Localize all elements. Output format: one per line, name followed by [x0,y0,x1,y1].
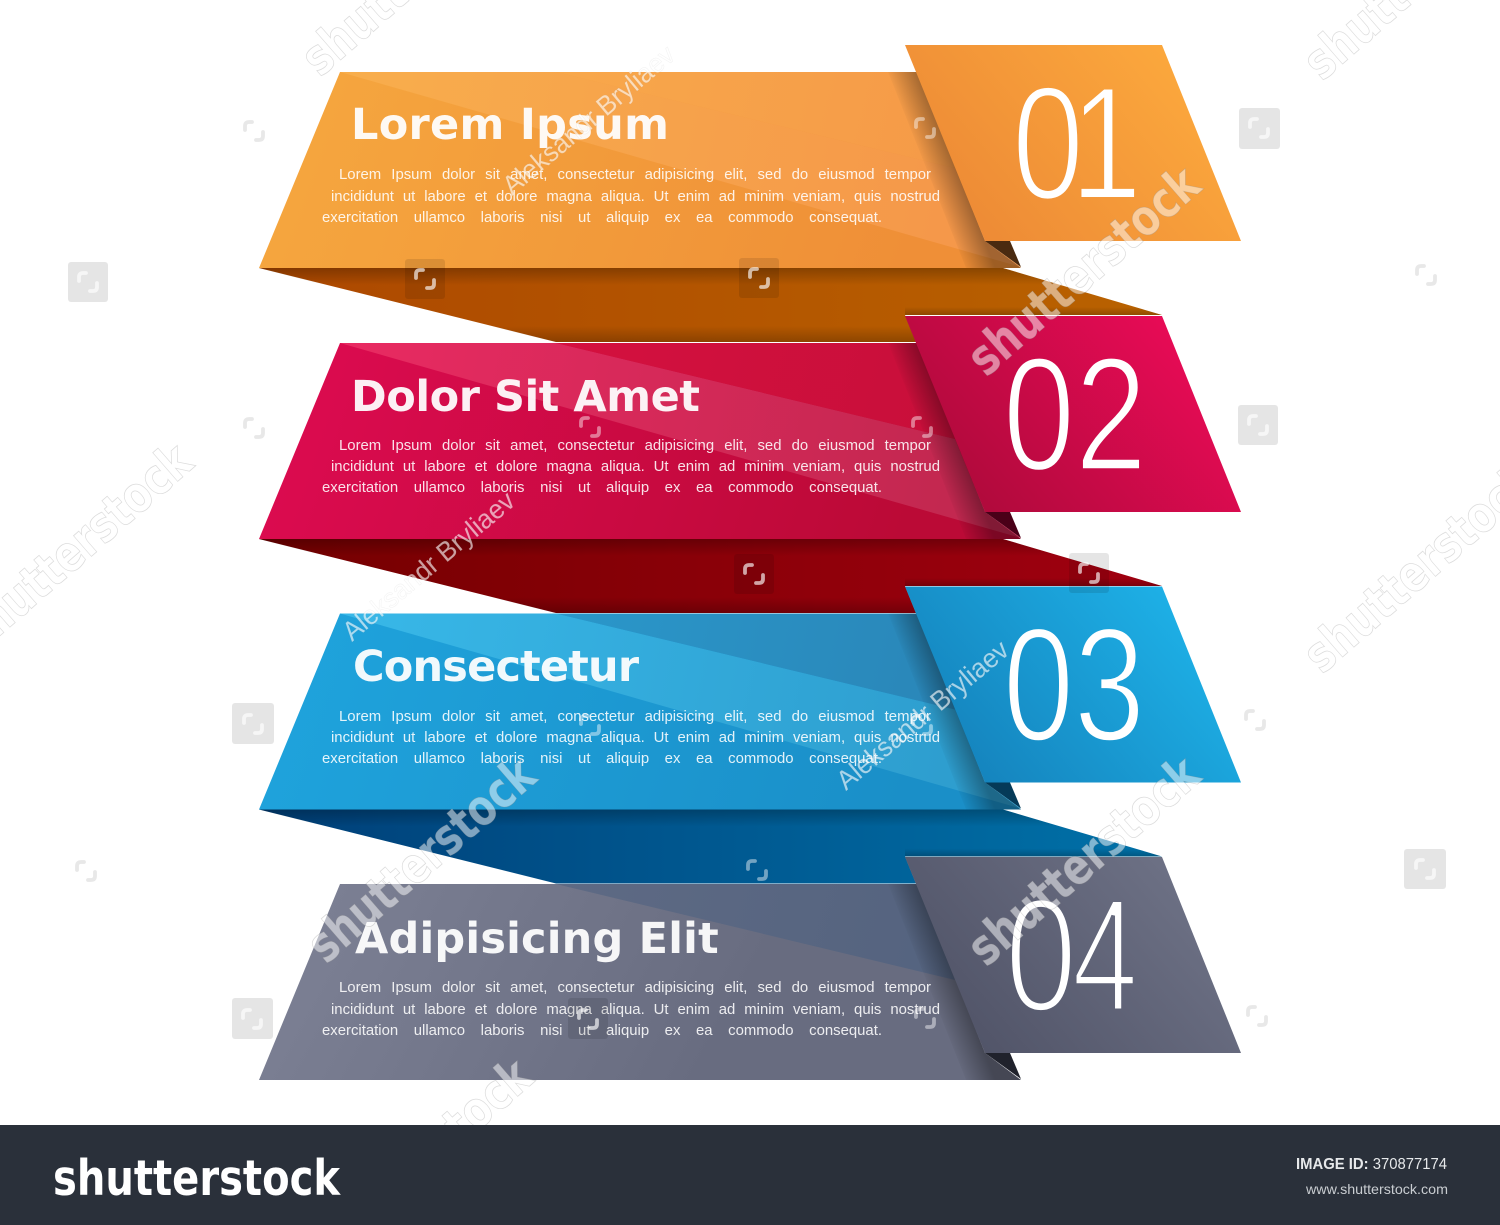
body text 1: exercitation ullamco laboris nisi ut aliquip ex ea commodo consequat. [322,210,882,226]
number tab 4: 4 [1072,865,1138,1046]
number tab 4 [905,857,1241,1053]
watermark: shutterstock marks: shutterstock [296,744,548,974]
body text 3: incididunt ut labore et dolore magna aliqua. Ut enim ad minim veniam, quis nostrud [331,730,940,746]
band 2: crimson [259,316,1241,613]
main panel 4 [259,884,1021,1080]
footer logo: shutterstock [53,1150,341,1207]
fold 2 [259,539,1162,613]
main panel 1 [259,72,1021,268]
body text 4: Lorem Ipsum dolor sit amet, consectetur adipisicing elit, sed do eiusmod tempor [339,980,931,996]
band 3: blue [259,586,1241,884]
band 1: orange [259,45,1241,342]
number tab 4: 0 [1005,865,1077,1046]
dark fold tip 3 [985,782,1021,808]
body text 4: incididunt ut labore et dolore magna aliqua. Ut enim ad minim veniam, quis nostrud [331,1002,940,1018]
number tab 3: 03 [1003,594,1145,776]
heading 3: Consectetur [353,642,638,692]
watermark: author credit: Aleksandr Bryliaev [337,485,521,647]
number tab 1: 1 [1070,53,1142,234]
main panel 3 [259,614,1021,810]
footer bar [0,1125,1500,1225]
body text 2: incididunt ut labore et dolore magna aliqua. Ut enim ad minim veniam, quis nostrud [331,459,940,475]
main panel 2 [259,343,1021,539]
number tab 2: 02 [1003,324,1147,505]
watermark: shutterstock marks: shutterstock [956,743,1212,977]
heading 4: Adipisicing Elit [355,914,719,964]
body text 3: exercitation ullamco laboris nisi ut aliquip ex ea commodo consequat. [322,751,882,767]
fold 3 [259,810,1162,884]
watermark: author credit [337,39,1015,796]
body text 3: Lorem Ipsum dolor sit amet, consectetur adipisicing elit, sed do eiusmod tempor [339,709,931,725]
body text 2: exercitation ullamco laboris nisi ut aliquip ex ea commodo consequat. [322,480,882,496]
number tab 3 [905,586,1241,782]
body text 1: incididunt ut labore et dolore magna aliqua. Ut enim ad minim veniam, quis nostrud [331,189,940,205]
body text 3 [322,709,940,767]
band 4: slate [259,857,1241,1080]
watermark: shutterstock marks: shutterstock [956,153,1212,387]
heading 1: Lorem Ipsum [351,100,669,150]
watermark: grey icon tiles on white [68,108,1446,1039]
watermark: author credit: Aleksandr Bryliaev [831,634,1015,796]
body text 4: exercitation ullamco laboris nisi ut aliquip ex ea commodo consequat. [322,1023,882,1039]
number tab 2 [905,316,1241,512]
fold 1 [259,268,1162,342]
heading 2: Dolor Sit Amet [351,372,699,422]
footer url: www.shutterstock.com [1305,1181,1448,1197]
body text 2: Lorem Ipsum dolor sit amet, consectetur adipisicing elit, sed do eiusmod tempor [339,438,931,454]
number tab 1 [905,45,1241,241]
body text 1 [322,167,940,226]
dark fold tip 4 [985,1053,1021,1079]
watermark: author credit: Aleksandr Bryliaev [497,39,681,201]
body text 2 [322,438,940,496]
dark fold tip 2 [985,512,1021,538]
dark fold tip 1 [985,241,1021,267]
watermark: small swirl icons [77,119,1435,1027]
body text 4 [322,980,940,1039]
number tab 1: 0 [1012,53,1084,234]
footer image id: IMAGE ID: 370877174 [1296,1156,1447,1173]
body text 1: Lorem Ipsum dolor sit amet, consectetur adipisicing elit, sed do eiusmod tempor [339,167,931,183]
